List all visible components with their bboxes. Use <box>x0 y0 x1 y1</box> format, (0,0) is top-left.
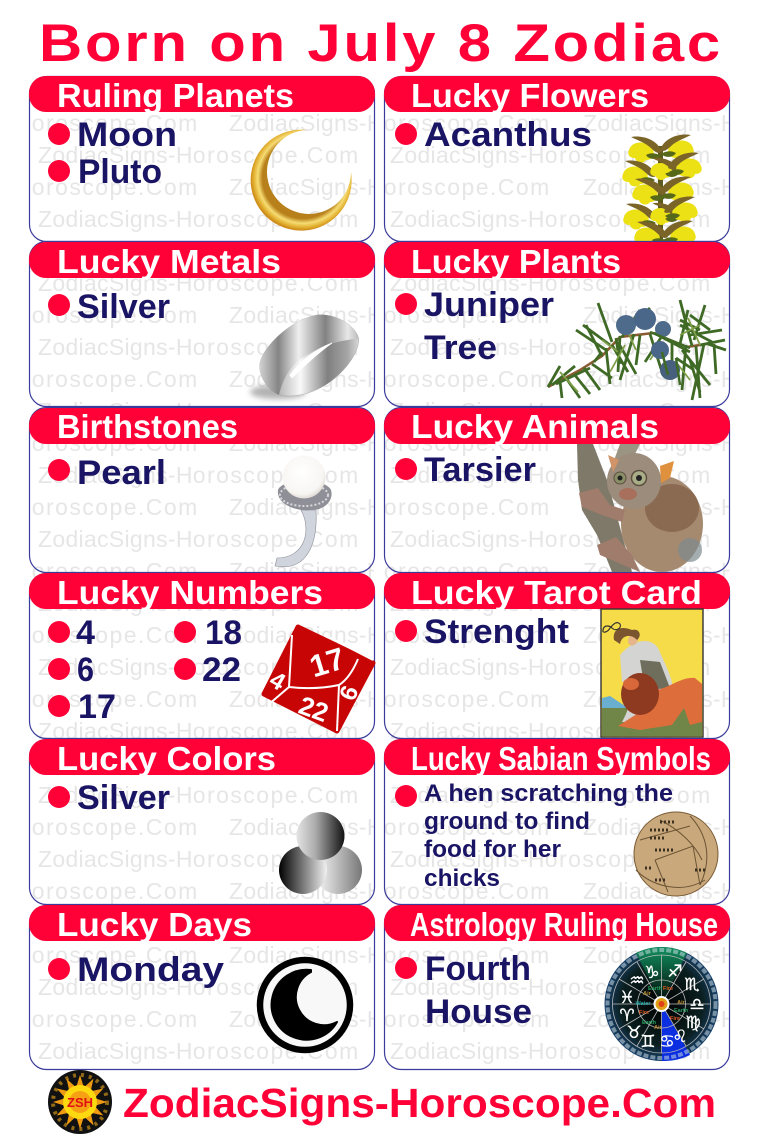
icon: zodiac wheel: Air <box>677 1000 686 1006</box>
watermark: ZodiacSigns-Horoscope.Com <box>390 654 712 680</box>
heading: lucky metals: Lucky Metals <box>57 243 281 280</box>
icon: zodiac wheel: Earth <box>674 1008 689 1014</box>
icon: zodiac wheel: Fire <box>670 1016 680 1022</box>
watermark: ZodiacSigns-Horoscope.Com <box>229 1006 551 1032</box>
list: house: Fourth <box>425 950 531 988</box>
panel: lucky colors <box>29 739 375 904</box>
list: numbers: 4 <box>76 614 95 652</box>
list: house: House <box>425 993 532 1031</box>
footer logo: ZSH <box>67 1095 93 1110</box>
watermark: ZodiacSigns-Horoscope.Com <box>38 590 360 616</box>
watermark: ZodiacSigns-Horoscope.Com <box>390 398 712 424</box>
list: plants <box>395 286 554 367</box>
watermark: ZodiacSigns-Horoscope.Com <box>38 846 360 872</box>
icon: zodiac wheel: Air <box>654 1025 663 1031</box>
footer logo <box>48 1070 112 1134</box>
heading: ruling planets <box>29 76 375 114</box>
watermark: ZodiacSigns-Horoscope.Com <box>229 494 551 520</box>
watermark: ZodiacSigns-Horoscope.Com <box>38 462 360 488</box>
icon: silver color circles <box>279 812 362 894</box>
icon: red dice: 4 <box>265 666 290 697</box>
icon: strength tarot card <box>601 609 703 737</box>
heading: lucky animals: Lucky Animals <box>411 408 659 445</box>
list: plants: Tree <box>424 329 497 367</box>
icon: juniper branch <box>548 300 726 400</box>
heading: lucky metals <box>29 242 375 280</box>
list: birthstones: Pearl <box>77 454 166 492</box>
icon: zodiac wheel: ♑ <box>644 963 660 982</box>
panel: lucky sabian symbols <box>384 739 730 904</box>
watermark: ZodiacSigns-Horoscope.Com <box>229 942 551 968</box>
icon: zodiac wheel: ♎ <box>689 995 705 1014</box>
watermark: ZodiacSigns-Horoscope.Com <box>38 270 360 296</box>
icon: acanthus flower <box>622 134 702 247</box>
icon: red dice: 6 <box>334 682 364 704</box>
icon: zodiac wheel: ♒ <box>629 971 645 990</box>
icon: zodiac wheel: ♓ <box>619 988 635 1007</box>
list: planets: Pluto <box>78 153 162 191</box>
panel: birthstones <box>29 408 375 572</box>
watermark: ZodiacSigns-Horoscope.Com <box>38 1038 360 1064</box>
watermark: ZodiacSigns-Horoscope.Com <box>229 814 551 840</box>
icon: zodiac wheel <box>604 947 718 1061</box>
icon: zodiac wheel: ♉ <box>626 1023 642 1042</box>
watermark: ZodiacSigns-Horoscope.Com <box>390 782 712 808</box>
heading: birthstones <box>29 408 375 445</box>
watermark: ZodiacSigns-Horoscope.Com <box>390 846 712 872</box>
watermark: ZodiacSigns-Horoscope.Com <box>38 206 360 232</box>
list: numbers: 6 <box>77 651 94 689</box>
watermark: ZodiacSigns-Horoscope.Com <box>229 366 551 392</box>
icon: zodiac wheel: ♐ <box>667 962 683 981</box>
icon: red dice <box>264 627 373 731</box>
watermark: ZodiacSigns-Horoscope.Com <box>38 718 360 744</box>
watermark: ZodiacSigns-Horoscope.Com <box>229 686 551 712</box>
list: house <box>395 950 532 1031</box>
list: tarot: Strenght <box>424 613 569 651</box>
icon: tarsier on a tree <box>577 444 703 572</box>
heading: lucky plants: Lucky Plants <box>411 243 621 280</box>
heading: lucky flowers <box>384 76 730 114</box>
icon: zodiac wheel: ♍ <box>685 1013 701 1032</box>
heading: lucky days: Lucky Days <box>57 906 252 943</box>
icon: red dice: 22 <box>295 690 332 728</box>
icon: zodiac wheel: ♏ <box>684 975 700 994</box>
panel: lucky plants <box>384 242 730 406</box>
text: sabian symbol <box>395 780 673 892</box>
watermark: ZodiacSigns-Horoscope.Com <box>38 334 360 360</box>
list: metals: Silver <box>77 288 170 326</box>
watermark: ZodiacSigns-Horoscope.Com <box>229 302 551 328</box>
icon: astrology chart disc <box>634 812 718 896</box>
watermark: ZodiacSigns-Horoscope.Com <box>390 974 712 1000</box>
title: Born on July 8 Zodiac <box>39 14 723 73</box>
icon: zodiac wheel: Water <box>635 1001 651 1007</box>
panel: lucky tarot card <box>384 573 730 738</box>
list: animals: Tarsier <box>424 451 536 489</box>
watermark: ZodiacSigns-Horoscope.Com <box>38 654 360 680</box>
panel: lucky flowers <box>384 76 730 247</box>
icon: zodiac wheel: Air <box>643 991 652 997</box>
watermark: ZodiacSigns-Horoscope.Com <box>229 622 551 648</box>
icon: zodiac wheel: ♊ <box>640 1032 656 1051</box>
text: sabian symbol: ground to find <box>424 808 590 835</box>
panel: lucky numbers <box>29 573 375 738</box>
heading: lucky tarot card: Lucky Tarot Card <box>411 574 702 611</box>
icon: moon badge <box>260 960 350 1050</box>
heading: lucky days <box>29 905 375 943</box>
heading: lucky numbers: Lucky Numbers <box>57 574 323 611</box>
watermark: ZodiacSigns-Horoscope.Com <box>390 1038 712 1064</box>
icon: zodiac wheel: Fire <box>639 1010 649 1016</box>
icon: zodiac wheel: ♌ <box>672 1027 688 1046</box>
list: numbers <box>48 614 242 726</box>
panel: astrology ruling house <box>384 905 730 1070</box>
list: planets: Moon <box>77 116 177 154</box>
icon: red dice: 17 <box>306 641 349 684</box>
icon: zodiac wheel: Earth <box>642 1020 657 1026</box>
icon: zodiac wheel: Earth <box>648 986 663 992</box>
watermark: ZodiacSigns-Horoscope.Com <box>390 718 712 744</box>
icon: zodiac wheel: Fire <box>663 986 673 992</box>
list: numbers: 22 <box>202 651 241 689</box>
panel: lucky days <box>29 905 375 1070</box>
heading: lucky numbers <box>29 573 375 611</box>
footer website: ZodiacSigns-Horoscope.Com <box>123 1080 716 1126</box>
watermark: ZodiacSigns-Horoscope.Com <box>38 782 360 808</box>
list: numbers: 17 <box>78 688 116 726</box>
heading: birthstones: Birthstones <box>57 408 238 445</box>
text: sabian symbol: A hen scratching the <box>424 780 673 807</box>
list: plants: Juniper <box>424 286 554 324</box>
icon: zodiac wheel: ♈ <box>619 1006 635 1025</box>
list: planets <box>48 116 177 191</box>
heading: lucky flowers: Lucky Flowers <box>411 77 649 114</box>
watermark: ZodiacSigns-Horoscope.Com <box>229 558 551 584</box>
watermark: ZodiacSigns-Horoscope.Com <box>390 206 712 232</box>
heading: ruling planets: Ruling Planets <box>57 77 294 114</box>
watermark: ZodiacSigns-Horoscope.Com <box>390 462 712 488</box>
watermark: ZodiacSigns-Horoscope.Com <box>229 430 551 456</box>
heading: lucky colors: Lucky Colors <box>57 740 276 777</box>
watermark: ZodiacSigns-Horoscope.Com <box>390 270 712 296</box>
icon: silver ring <box>250 315 359 399</box>
watermark: ZodiacSigns-Horoscope.Com <box>38 526 360 552</box>
heading: lucky plants <box>384 242 730 280</box>
list: numbers: 18 <box>205 614 242 652</box>
icon: zodiac wheel: ♋ <box>659 1032 675 1051</box>
text: sabian symbol: chicks <box>424 865 500 892</box>
watermark: ZodiacSigns-Horoscope.Com <box>38 142 360 168</box>
watermark: ZodiacSigns-Horoscope.Com <box>390 526 712 552</box>
watermark: ZodiacSigns-Horoscope.Com <box>229 174 551 200</box>
list: days: Monday <box>77 951 224 989</box>
icon: golden crescent moon <box>251 130 352 231</box>
list: colors: Silver <box>77 779 170 817</box>
icon: pearl ring <box>275 456 332 567</box>
watermark: ZodiacSigns-Horoscope.Com <box>38 398 360 424</box>
watermark: ZodiacSigns-Horoscope.Com <box>390 142 712 168</box>
panel: lucky metals <box>29 242 375 406</box>
watermark: ZodiacSigns-Horoscope.Com <box>229 878 551 904</box>
list: flowers: Acanthus <box>424 116 592 154</box>
heading: lucky colors <box>29 739 375 777</box>
watermark: ZodiacSigns-Horoscope.Com <box>229 110 551 136</box>
text: sabian symbol: food for her <box>424 836 561 863</box>
heading: lucky animals <box>384 408 730 445</box>
panel: ruling planets <box>29 76 375 242</box>
watermark: ZodiacSigns-Horoscope.Com <box>390 334 712 360</box>
panel: lucky animals <box>384 408 730 572</box>
watermark: ZodiacSigns-Horoscope.Com <box>38 974 360 1000</box>
watermark: ZodiacSigns-Horoscope.Com <box>390 590 712 616</box>
